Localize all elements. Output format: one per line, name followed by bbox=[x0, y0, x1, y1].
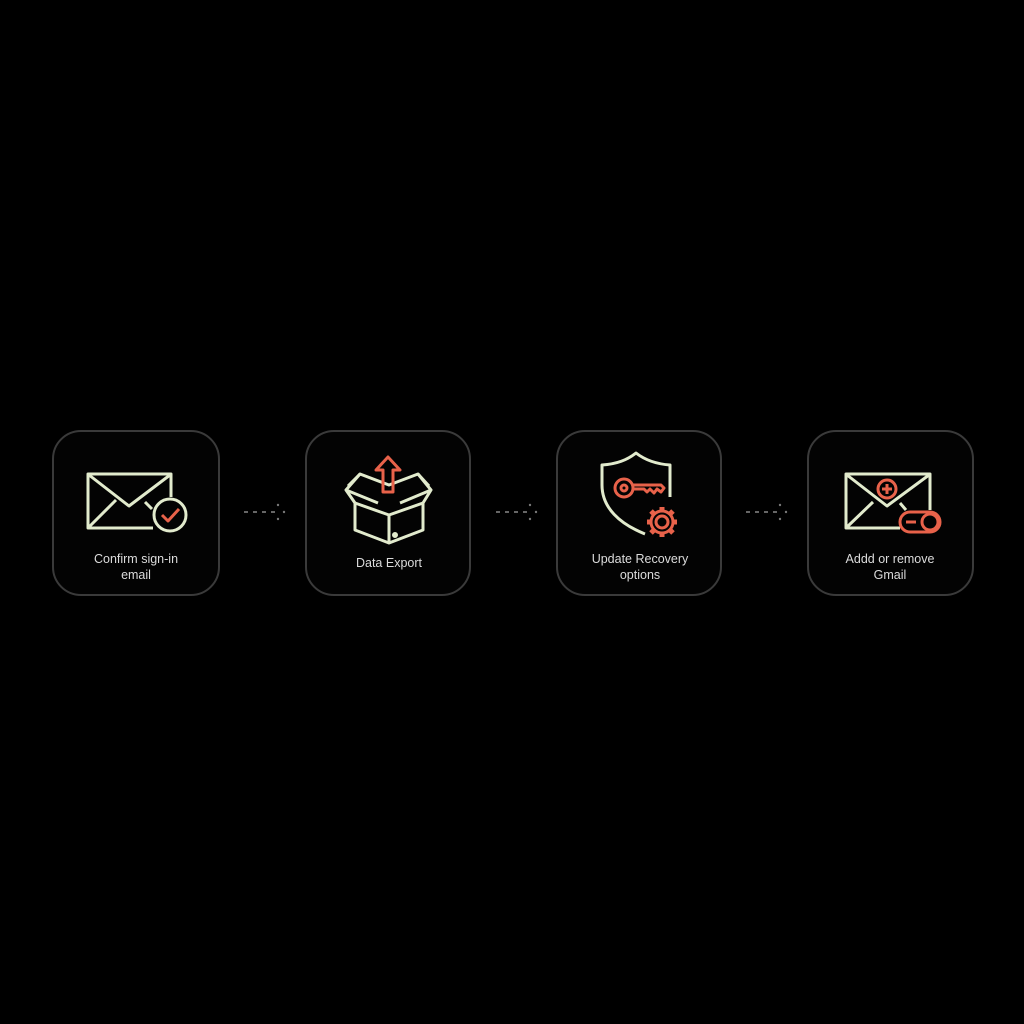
arrow 1 bbox=[244, 504, 285, 520]
label: email bbox=[121, 568, 151, 582]
arrow 2 bbox=[496, 504, 537, 520]
label: Gmail bbox=[874, 568, 906, 582]
panel: add or remove gmail bbox=[808, 431, 973, 595]
icon: shield with key and gear bbox=[602, 453, 677, 537]
label: Addd or remove bbox=[846, 552, 935, 566]
label: options bbox=[620, 568, 660, 582]
label bbox=[94, 552, 178, 582]
label: Data Export bbox=[356, 556, 423, 570]
label: Confirm sign-in bbox=[94, 552, 178, 566]
arrow 3 bbox=[746, 504, 787, 520]
icon: envelope with plus and toggle bbox=[846, 474, 940, 532]
panel: update recovery options bbox=[557, 431, 721, 595]
label: Update Recovery bbox=[592, 552, 689, 566]
label bbox=[846, 552, 935, 582]
label bbox=[592, 552, 689, 582]
panel: confirm sign-in email bbox=[53, 431, 219, 595]
icon: open box with arrow bbox=[346, 457, 431, 543]
panel: data export bbox=[306, 431, 470, 595]
icon: envelope with check bbox=[88, 474, 186, 531]
